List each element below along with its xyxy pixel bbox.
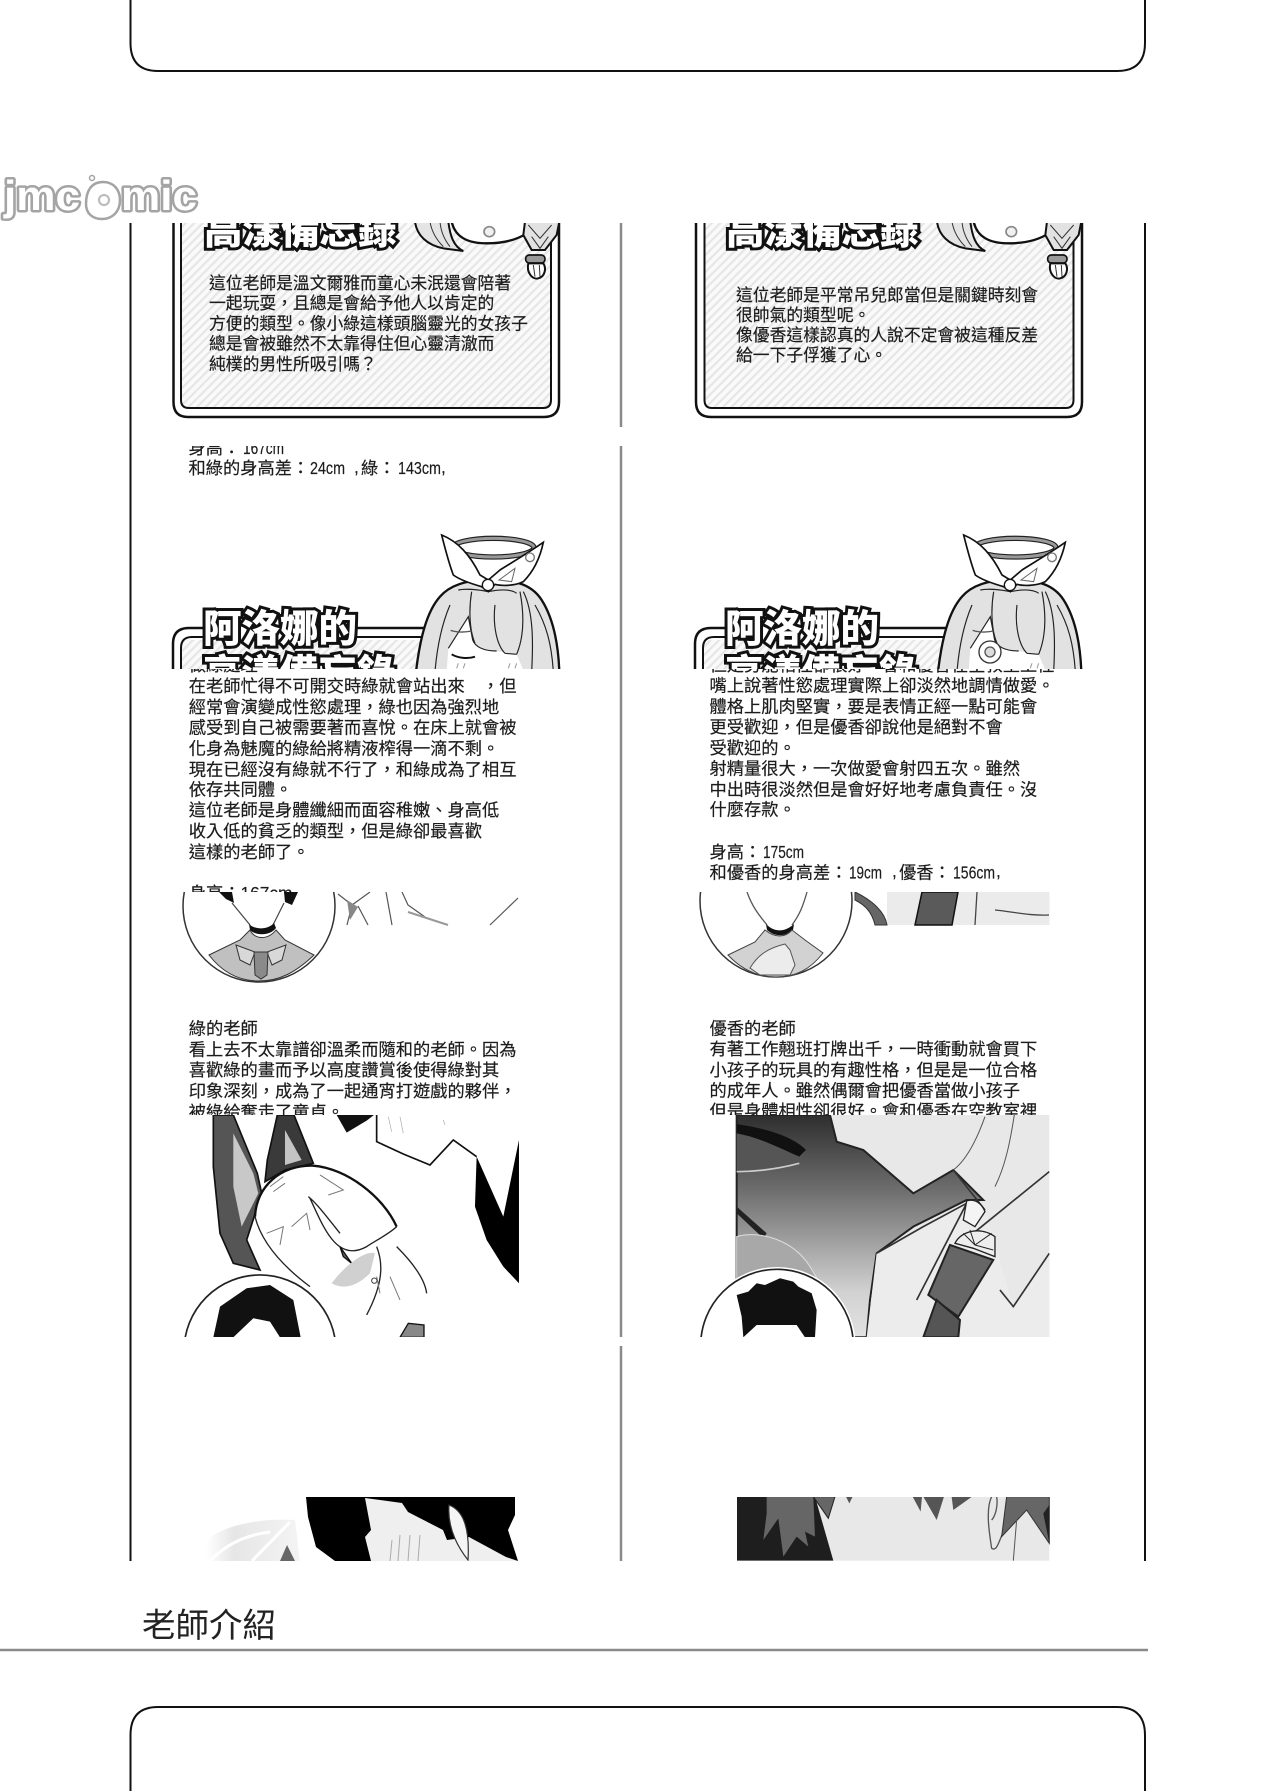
text band: teacher of Yuuka, profile: 更受歡迎，但是優香卻說他是絕對不會 [710,717,1003,737]
text band: teacher of Yuuka, profile: 156cm [953,862,995,882]
text band: teacher of Yuuka, profile: 什麼存款。 [710,800,796,820]
Arona illustration, right [938,535,1081,672]
text band: teacher of Midori, profile: 現在已經沒有綠就不行了，和綠成為了相互 [189,760,517,780]
teacher of Midori: description [189,1018,517,1122]
illustration: lower panel, left [206,1497,518,1561]
illustration: lower panel, right [737,1497,1049,1561]
teacher of Midori: description: 印象深刻，成為了一起通宵打遊戲的夥伴， [189,1081,517,1101]
bottom page frame [130,1707,1145,1791]
teacher of Yuuka: description: 優香的老師 [710,1018,796,1038]
memo text, left column: 純樸的男性所吸引嗎？ [209,355,377,374]
text band: teacher of Midori, profile: 化身為魅魔的綠給將精液榨得一滴不剩。 [189,738,499,758]
text band: teacher of Yuuka, profile: 但是勞能相性卻很好。會和優香在空教室上性 [710,655,1055,675]
height stats, left column: 143cm [398,458,441,478]
text band: teacher of Midori, profile: 這位老師是身體纖細而面容稚嫩、身高低 [189,800,499,820]
text band: teacher of Yuuka, profile: , [996,861,1001,881]
memo text, left column: 總是會被雖然不太靠得住但心靈清澈而 [209,334,494,354]
text band: teacher of Midori, profile [189,669,516,892]
watermark: jmcomic: jmc [3,172,80,219]
memo title, right: 高漾備忘錄 [726,210,919,253]
teacher of Midori: description: 喜歡綠的畫而予以高度讚賞後使得綠對其 [189,1060,499,1080]
text band: teacher of Yuuka, profile: , [892,861,897,881]
height stats, left column: 167cm [243,438,284,458]
teacher of Yuuka: description: 但是身體相性卻很好。會和優香在空教室裡 [710,1101,1037,1121]
height stats, left column [188,446,444,476]
header title, right: 阿洛娜的 [725,608,879,651]
height stats, left column: 24cm [310,458,345,478]
memo text, left column: 方便的類型。像小綠這樣頭腦靈光的女孩子 [209,314,528,334]
header subtitle, right: 高漾備忘錄 [725,653,918,696]
teacher of Midori: description: 看上去不太靠譜卻溫柔而隨和的老師。因為 [189,1040,517,1060]
text band: teacher of Midori, profile: 在老師忙得不可開交時綠就會站出來 ，但 [189,676,517,696]
memo text, left column: 一起玩耍，且總是會給予他人以肯定的 [209,294,494,313]
text band: teacher of Yuuka, profile: 身高： [710,842,761,862]
text band: teacher of Yuuka, profile: 中出時很淡然但是會好好地考慮負責任。沒 [710,780,1037,800]
text band: teacher of Midori, profile: 經常會演變成性慾處理，綠也因為強烈地 [189,697,499,717]
text band: teacher of Yuuka, profile [710,655,1055,882]
memo text, right column: 這位老師是平常吊兒郎當但是關鍵時刻會 [736,285,1038,305]
teacher of Midori: description: 被綠給奪走了童貞。 [189,1102,344,1122]
panel: memo box, right column [696,210,1082,417]
memo text, right column [736,285,1038,365]
header subtitle, left: 高漾備忘錄 [203,653,396,696]
memo text, right column: 給一下子俘獲了心。 [736,346,887,365]
memo text, left column [209,273,528,374]
illustration: Yuuka with teacher [700,1115,1050,1337]
illustration: Midori with teacher [184,1115,519,1337]
text band: teacher of Yuuka, profile: 優香： [899,862,951,882]
Arona illustration, left [416,535,559,672]
teacher of Yuuka: description [710,1018,1037,1121]
height stats, left column: 身高： [188,438,240,458]
text band: teacher of Midori, profile: 收入低的貧乏的類型，但是綠卻最喜歡 [189,821,482,841]
memo text, left column: 這位老師是溫文爾雅而童心未泯還會陪著 [209,273,511,293]
panel: header with Arona, left column [172,534,560,669]
text band: teacher of Midori, profile: 感受到自己被需要著而喜悅。在床上就會被 [189,718,517,738]
chibi girl chin and braid, right [937,222,1081,279]
section rule [0,1649,1148,1651]
chibi girl chin and braid, left [415,222,559,279]
panel: header with Arona, right column [694,534,1082,669]
teacher of Yuuka: description: 小孩子的玩具的有趣性格，但是是一位合格 [710,1060,1037,1080]
text band: teacher of Midori, profile: 這樣的老師了。 [189,842,310,862]
column divider [620,223,622,1561]
teacher of Midori: description: 綠的老師 [189,1018,258,1038]
section heading: 老師介紹 [142,1608,276,1645]
header title, left: 阿洛娜的 [203,608,357,651]
panel: memo box, left column [174,210,559,417]
top page frame [130,0,1145,71]
memo text, right column: 很帥氣的類型呢。 [736,306,870,325]
watermark: jmcomic [3,172,197,219]
illustration strip and portrait: teacher of Yuuka [699,892,1050,978]
column frame: left line [130,223,132,1561]
column frame: right line [1144,223,1146,1561]
memo title, left: 高漾備忘錄 [204,210,397,253]
text band: teacher of Midori, profile: 身高：167cm [189,883,292,903]
height stats, left column: , [441,457,446,477]
teacher of Yuuka: description: 的成年人。雖然偶爾會把優香當做小孩子 [710,1080,1020,1100]
text band: teacher of Midori, profile: 做綠處理 [189,655,258,675]
watermark: jmcomic: mic [121,172,197,219]
text band: teacher of Yuuka, profile: 受歡迎的。 [710,738,796,758]
memo text, right column: 像優香這樣認真的人說不定會被這種反差 [736,325,1038,345]
height stats, left column: , [354,457,359,477]
text band: teacher of Yuuka, profile: 嘴上說著性慾處理實際上卻淡然地調情做愛。 [710,676,1055,696]
teacher of Yuuka: description: 有著工作翹班打牌出千，一時衝動就會買下 [710,1039,1037,1059]
text band: teacher of Yuuka, profile: 19cm [849,862,882,882]
text band: teacher of Yuuka, profile: 射精量很大，一次做愛會射四五次。雖然 [710,758,1020,778]
text band: teacher of Yuuka, profile: 和優香的身高差： [710,862,848,882]
text band: teacher of Yuuka, profile: 體格上肌肉堅實，要是表情正經一點可能會 [710,696,1037,716]
text band: teacher of Yuuka, profile: 175cm [763,842,804,862]
height stats, left column: 和綠的身高差： [188,458,309,478]
text band: teacher of Midori, profile: 依存共同體。 [189,780,292,800]
illustration strip and portrait: teacher of Midori [182,892,518,983]
height stats, left column: 綠： [361,458,396,478]
